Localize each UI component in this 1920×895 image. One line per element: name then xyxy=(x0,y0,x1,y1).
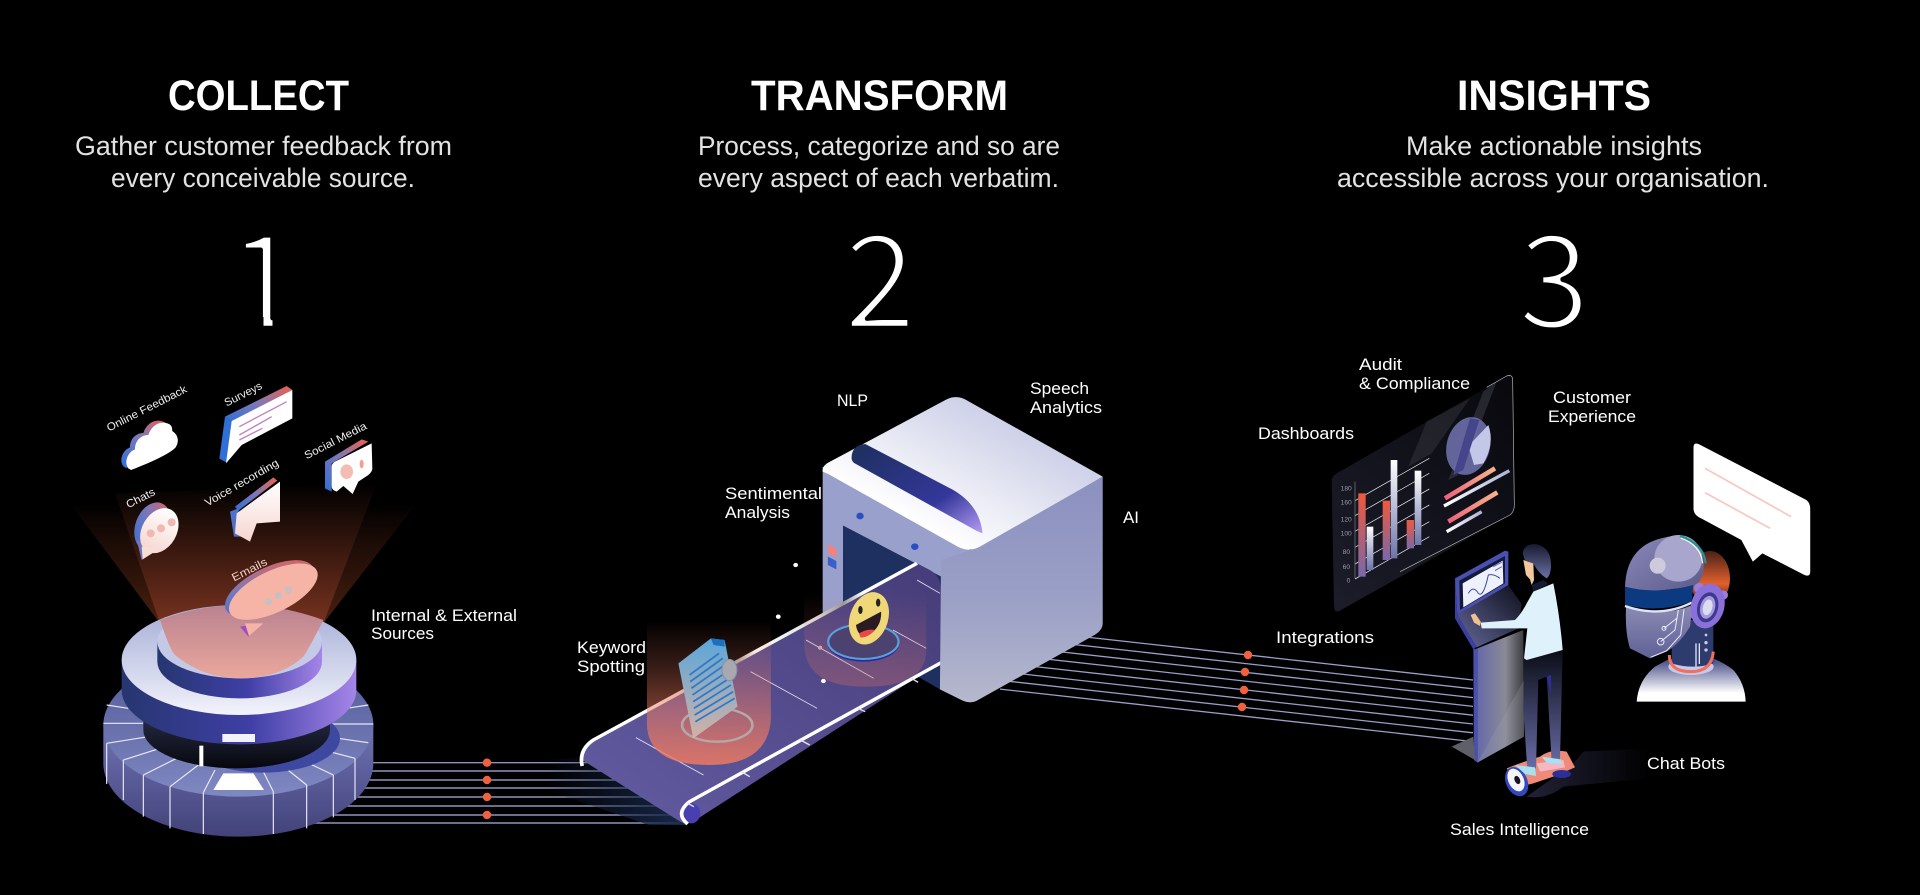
chat bot robot xyxy=(1625,535,1746,702)
icon: survey bubble xyxy=(219,386,292,463)
dashboard axis values: 180 xyxy=(1341,486,1352,493)
panel: transform xyxy=(545,72,1139,825)
icon: email bubble xyxy=(217,549,326,637)
labels: transform capabilities: Sentimental xyxy=(725,485,822,503)
dashboard axis values xyxy=(1341,486,1352,584)
dashboard axis values: 160 xyxy=(1341,500,1352,507)
person on hoverboard xyxy=(1471,544,1575,800)
labels: insight outputs: Experience xyxy=(1548,408,1636,426)
description: transform: Process, categorize and so are xyxy=(698,131,1060,161)
dashboard axis values: 100 xyxy=(1341,531,1352,538)
labels: transform capabilities: AI xyxy=(1123,509,1139,527)
labels: transform capabilities: Analysis xyxy=(725,504,790,522)
labels: transform capabilities: Speech xyxy=(1030,380,1089,398)
light cone xyxy=(70,483,417,623)
labels: transform capabilities: NLP xyxy=(837,392,868,410)
step number 1: 1 xyxy=(228,178,300,366)
icon: chat bubble xyxy=(128,497,186,560)
icon: social media bubble xyxy=(325,439,372,494)
label: internal and external sources: Internal & External xyxy=(371,607,517,625)
dashboard panel xyxy=(1332,375,1514,611)
dashboard axis values: 0 xyxy=(1347,577,1351,584)
description: insights: Make actionable insights xyxy=(1406,131,1702,161)
description: transform: every aspect of each verbatim. xyxy=(698,163,1059,193)
dark core xyxy=(143,693,330,768)
conveyor belt xyxy=(581,563,941,824)
item glow: document xyxy=(647,620,771,765)
step number 2: 2 xyxy=(844,178,916,366)
machine side and top xyxy=(823,397,1103,702)
description: insights: accessible across your organisation. xyxy=(1337,163,1769,193)
labels: transform capabilities xyxy=(577,380,1139,676)
machine front face xyxy=(823,467,971,690)
labels: insight outputs: Integrations xyxy=(1276,629,1374,647)
dashboard axis values: 80 xyxy=(1343,549,1350,556)
illustration: collection platform xyxy=(70,380,417,837)
panel: collect xyxy=(70,72,517,837)
dashboard axis values: 120 xyxy=(1341,517,1352,524)
base cylinder xyxy=(103,653,373,837)
labels: insight outputs: Dashboards xyxy=(1258,425,1354,443)
labels: insight outputs: Chat Bots xyxy=(1647,755,1725,773)
labels: insight outputs: Customer xyxy=(1553,389,1632,407)
description: collect: Gather customer feedback from xyxy=(75,131,452,161)
description: insights xyxy=(1337,131,1769,193)
description: collect xyxy=(75,131,452,193)
document on ring xyxy=(678,638,752,742)
icon labels: Chats xyxy=(124,486,158,511)
icon labels: Surveys xyxy=(223,380,265,409)
icon labels: Online Feedback xyxy=(105,383,190,434)
conveyor shadow xyxy=(545,758,688,825)
labels: transform capabilities: Keyword xyxy=(577,639,646,657)
dashboard axis values: 60 xyxy=(1343,564,1350,571)
floating dots xyxy=(776,563,826,683)
labels: transform capabilities: Spotting xyxy=(577,658,645,676)
heading: insights: INSIGHTS xyxy=(1457,72,1651,120)
shadow xyxy=(1527,748,1650,797)
icon: megaphone xyxy=(230,477,280,542)
label: internal and external sources: Sources xyxy=(371,625,434,643)
icon labels: Voice recording xyxy=(203,457,281,509)
labels: insight outputs: & Compliance xyxy=(1359,375,1470,393)
step number 3: 3 xyxy=(1518,178,1590,366)
label: internal and external sources xyxy=(371,607,517,643)
connector lines: collect to transform xyxy=(310,758,680,823)
heading: collect: COLLECT xyxy=(168,72,349,120)
kiosk and person xyxy=(1452,544,1650,800)
emoji on ring xyxy=(827,588,899,662)
upper disc xyxy=(122,605,356,744)
icon labels: Emails xyxy=(230,556,270,584)
heading: transform: TRANSFORM xyxy=(751,72,1008,120)
connector lines: transform to insights xyxy=(1000,628,1473,742)
kiosk xyxy=(1452,551,1524,763)
labels: insight outputs: Audit xyxy=(1359,356,1402,374)
illustration: processing machine and conveyor xyxy=(545,397,1103,825)
icon: cloud xyxy=(121,421,178,470)
panel: insights xyxy=(1258,72,1810,839)
icon labels: Social Media xyxy=(303,420,370,462)
description: collect: every conceivable source. xyxy=(111,163,415,193)
labels: insight outputs xyxy=(1258,356,1725,839)
description: transform xyxy=(698,131,1060,193)
labels: insight outputs: Sales Intelligence xyxy=(1450,821,1589,839)
icon labels xyxy=(105,380,370,584)
item glow: emoji xyxy=(804,593,926,687)
speech bubble xyxy=(1693,443,1810,576)
labels: transform capabilities: Analytics xyxy=(1030,399,1102,417)
